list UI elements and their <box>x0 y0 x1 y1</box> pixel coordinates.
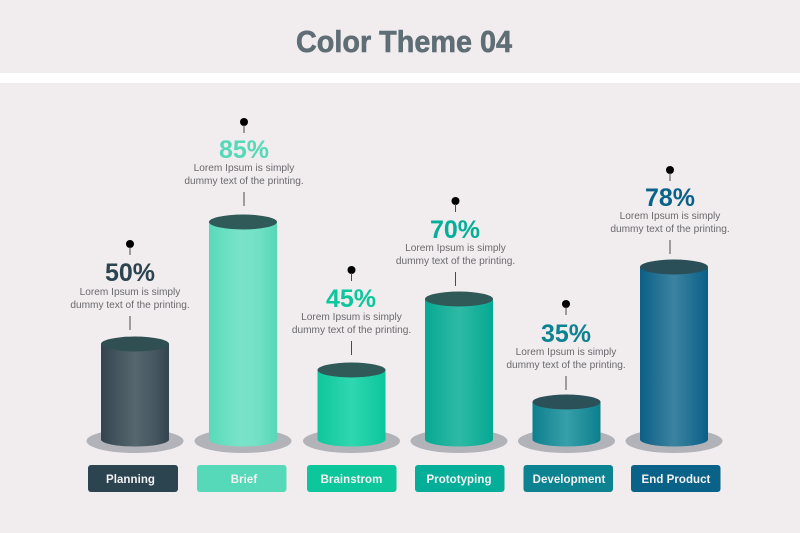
pin <box>562 300 570 315</box>
title: Color Theme 04 <box>296 24 513 59</box>
label <box>88 465 178 492</box>
column: Brainstrom <box>292 266 411 492</box>
description: dummy text of the printing. <box>506 360 626 371</box>
column: Development <box>506 300 626 492</box>
connector <box>669 240 671 254</box>
cylinder <box>532 394 600 446</box>
label <box>307 465 396 492</box>
description: Lorem Ipsum is simply <box>516 347 617 358</box>
pin <box>126 240 134 255</box>
white header divider <box>0 73 800 83</box>
value 70%: 70% <box>430 216 480 244</box>
connector <box>243 192 245 206</box>
cylinder <box>101 336 169 447</box>
value 45%: 45% <box>326 285 376 313</box>
label <box>631 465 720 492</box>
base shadow <box>86 429 184 453</box>
label <box>524 465 613 492</box>
connector <box>350 341 352 355</box>
column: End Product <box>610 166 730 492</box>
description: dummy text of the printing. <box>184 176 304 187</box>
column: Planning <box>70 240 190 492</box>
label <box>415 465 504 492</box>
base shadow <box>194 429 292 453</box>
pin <box>348 266 356 281</box>
label: Brief <box>231 474 257 486</box>
value 50%: 50% <box>105 259 155 287</box>
connector <box>565 376 567 390</box>
base shadow <box>626 429 722 453</box>
description: dummy text of the printing. <box>396 256 515 267</box>
value 78%: 78% <box>645 184 695 212</box>
pin <box>452 197 460 212</box>
value 85%: 85% <box>219 136 269 164</box>
description: Lorem Ipsum is simply <box>620 211 721 222</box>
description: Lorem Ipsum is simply <box>405 243 507 254</box>
column: Prototyping <box>396 197 515 492</box>
pin <box>240 118 248 133</box>
label: Brainstrom <box>321 474 382 486</box>
cylinder <box>425 292 493 447</box>
description: dummy text of the printing. <box>70 300 190 311</box>
cylinder <box>318 362 386 447</box>
base shadow <box>303 429 400 453</box>
column: Brief <box>184 118 304 492</box>
base shadow <box>518 429 615 453</box>
description: dummy text of the printing. <box>610 224 730 235</box>
label: Prototyping <box>426 474 492 486</box>
label: End Product <box>642 474 711 486</box>
cylinder <box>209 214 277 446</box>
description: Lorem Ipsum is simply <box>80 287 181 298</box>
label <box>197 465 286 492</box>
base shadow <box>410 429 508 453</box>
label: Development <box>533 474 605 486</box>
connector <box>129 316 131 330</box>
description: Lorem Ipsum is simply <box>301 312 403 323</box>
label: Planning <box>106 474 155 486</box>
description: Lorem Ipsum is simply <box>194 163 295 174</box>
value 35%: 35% <box>541 320 591 348</box>
connector <box>454 272 456 286</box>
description: dummy text of the printing. <box>292 325 411 336</box>
cylinder <box>640 260 708 447</box>
pin <box>666 166 674 181</box>
